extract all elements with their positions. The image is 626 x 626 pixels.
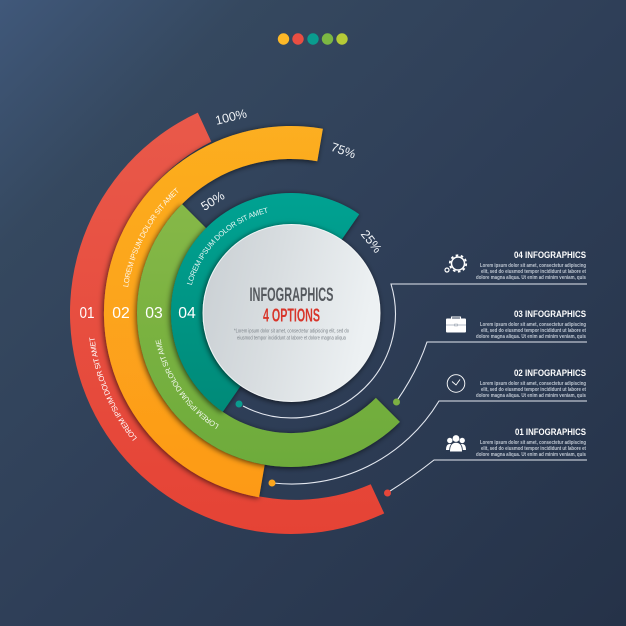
ring labels: LOREM IPSUM DOLOR SIT AMET	[156, 339, 219, 429]
center description: eiusmod tempor incididunt at labore et dolore magna aliqua	[237, 336, 346, 342]
percent labels: 25%	[358, 227, 384, 256]
ring: green 03	[137, 204, 400, 467]
ring labels	[89, 188, 268, 441]
block: 03 infographics: elit, sed do eiusmod tempor incididunt ut labore et	[481, 328, 586, 334]
ring: teal 04	[171, 193, 359, 412]
percent labels: 50%	[199, 189, 227, 214]
block: 02 infographics: elit, sed do eiusmod tempor incididunt ut labore et	[481, 387, 586, 393]
block: 04 infographics	[476, 250, 586, 281]
block: 03 infographics: dolore magna aliqua. Ut enim ad minim veniam, quis	[476, 334, 586, 340]
ring: orange 02	[104, 126, 323, 497]
center description	[234, 328, 349, 342]
block: 03 infographics	[476, 309, 586, 340]
center subtitle: 4 OPTIONS	[263, 304, 320, 326]
block: 04 infographics: elit, sed do eiusmod tempor incididunt ut labore et	[481, 269, 586, 275]
ring: red 01	[70, 113, 384, 534]
ring labels: LOREM IPSUM DOLOR SIT AMET	[123, 188, 178, 287]
connector lines	[243, 284, 587, 493]
icon: gears	[445, 255, 466, 272]
center description: *Lorem ipsum dolor sit amet, consectetur adipiscing elit, sed do	[234, 328, 349, 334]
block: 04 infographics: dolore magna aliqua. Ut enim ad minim veniam, quis	[476, 275, 586, 281]
ring labels: LOREM IPSUM DOLOR SIT AMET	[186, 208, 268, 285]
ring numbers: 01	[80, 305, 95, 322]
ring labels: LOREM IPSUM DOLOR SIT AMET	[89, 338, 137, 441]
block: 01 infographics	[476, 427, 586, 458]
block: 03 infographics: Lorem ipsum dolor sit amet, consectetur adipiscing	[480, 322, 586, 328]
ring numbers	[80, 305, 196, 322]
block: 01 infographics: Lorem ipsum dolor sit amet, consectetur adipiscing	[480, 440, 586, 446]
block: 04 infographics: 04 INFOGRAPHICS	[514, 250, 586, 261]
connector dots	[236, 398, 400, 496]
percent labels: 100%	[214, 106, 248, 128]
ring numbers: 04	[178, 305, 196, 322]
block: 04 infographics: Lorem ipsum dolor sit amet, consectetur adipiscing	[480, 263, 586, 269]
icon: people	[446, 435, 466, 452]
block: 02 infographics: 02 INFOGRAPHICS	[514, 368, 586, 379]
icon: briefcase	[446, 317, 466, 332]
color legend dots	[278, 33, 348, 45]
block: 01 infographics: 01 INFOGRAPHICS	[515, 427, 586, 438]
block: 01 infographics: elit, sed do eiusmod tempor incididunt ut labore et	[481, 446, 586, 452]
icon: clock	[447, 375, 465, 392]
block: 02 infographics: dolore magna aliqua. Ut enim ad minim veniam, quis	[476, 393, 586, 399]
ring numbers: 02	[112, 305, 130, 322]
percent labels: 75%	[329, 140, 357, 161]
block: 01 infographics: dolore magna aliqua. Ut enim ad minim veniam, quis	[476, 452, 586, 458]
center title: INFOGRAPHICS	[250, 285, 334, 306]
percent labels	[199, 106, 384, 256]
center circle	[203, 224, 380, 402]
block: 02 infographics: Lorem ipsum dolor sit amet, consectetur adipiscing	[480, 381, 586, 387]
ring numbers: 03	[145, 305, 163, 322]
block: 03 infographics: 03 INFOGRAPHICS	[514, 309, 586, 320]
block: 02 infographics	[476, 368, 586, 399]
